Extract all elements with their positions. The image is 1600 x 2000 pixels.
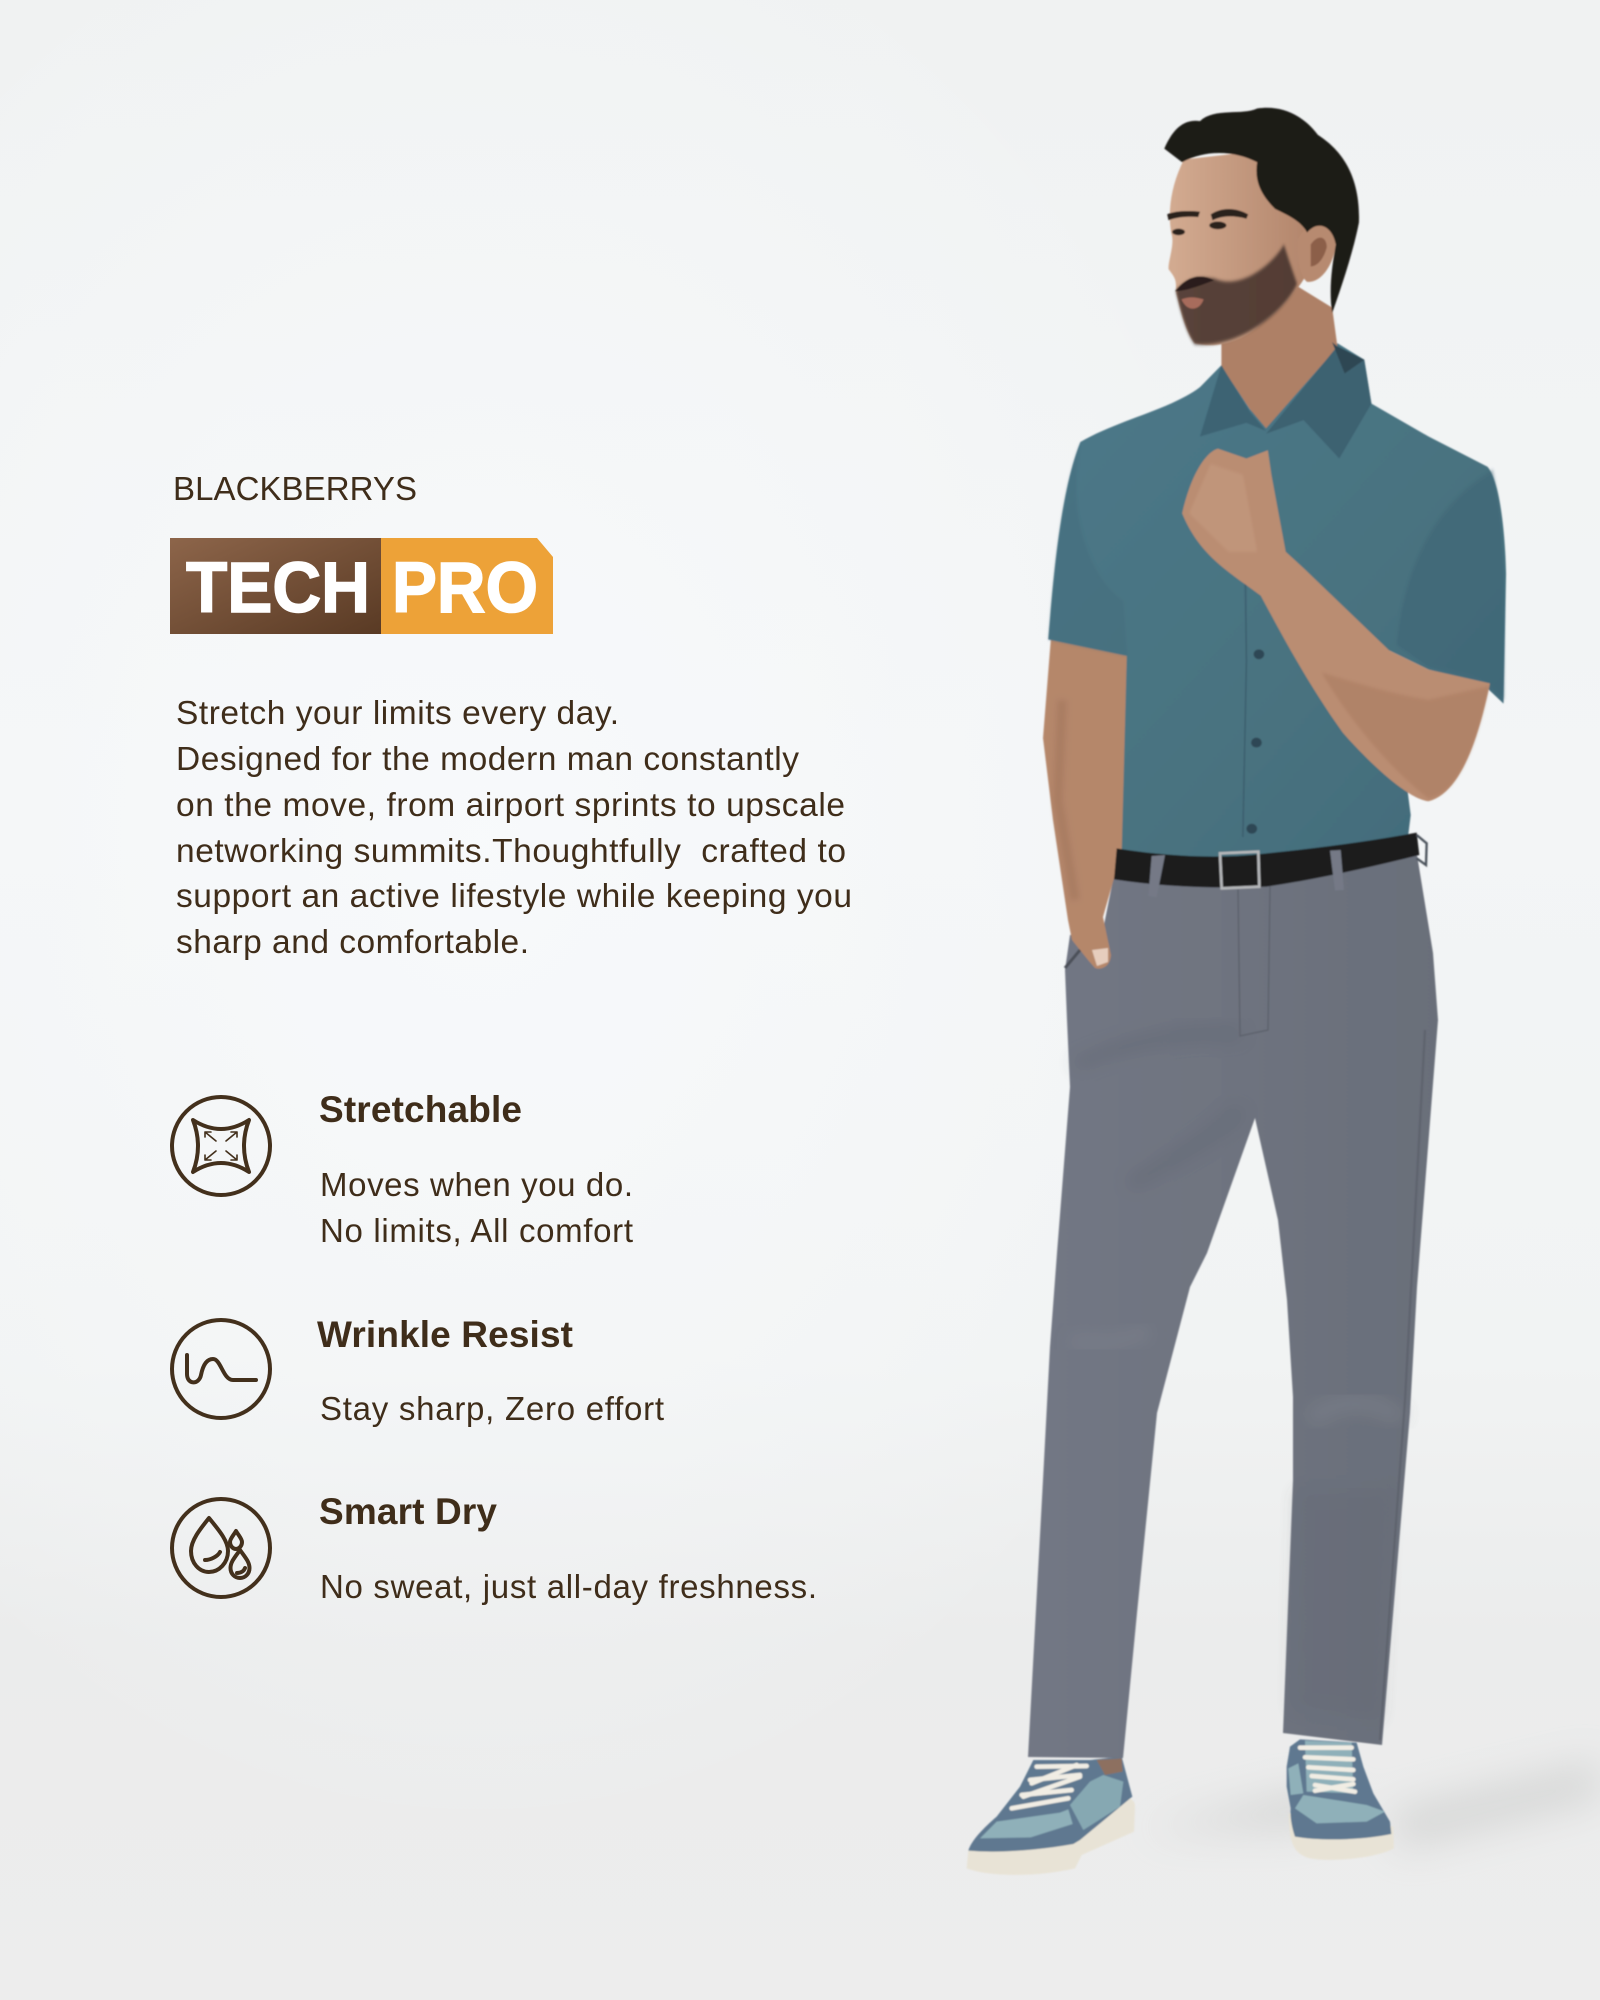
heading: stretchable: Stretchable (319, 1089, 522, 1130)
left arm and hand in pocket (1043, 625, 1130, 969)
feature: stretchable (172, 1089, 633, 1249)
logo: Tech Pro (170, 538, 553, 634)
description text (176, 695, 852, 961)
right shoe (1287, 1739, 1394, 1860)
description text: Designed for the modern man constantly (176, 741, 799, 778)
belt (1114, 833, 1427, 897)
icon: wrinkle line (172, 1320, 270, 1418)
brand name: BLACKBERRYS (173, 470, 417, 507)
stretchable description: No limits, All comfort (320, 1212, 633, 1249)
logo: Tech Pro: PRO (392, 549, 538, 628)
floor shadow (1140, 1760, 1600, 1850)
head (1167, 151, 1336, 345)
smart dry description: No sweat, just all-day freshness. (320, 1568, 817, 1605)
forearm and hand (1182, 449, 1490, 801)
wrinkle resist description: Stay sharp, Zero effort (320, 1390, 664, 1427)
heading: smart dry: Smart Dry (319, 1491, 497, 1532)
heading: wrinkle resist: Wrinkle Resist (317, 1314, 573, 1355)
shirt collar (1200, 342, 1371, 458)
icon: stretch fabric (172, 1097, 270, 1195)
stretchable description (320, 1166, 633, 1249)
stretchable description: Moves when you do. (320, 1166, 633, 1203)
description text: support an active lifestyle while keeping you (176, 878, 852, 915)
model figure (967, 108, 1506, 1875)
left shoe (967, 1757, 1135, 1875)
icon: water drops (172, 1499, 270, 1597)
trousers (1028, 855, 1438, 1758)
shirt buttons (1246, 649, 1264, 834)
description text: networking summits.Thoughtfully crafted to (176, 833, 846, 870)
hair (1164, 108, 1359, 313)
description text: sharp and comfortable. (176, 924, 529, 961)
description text: on the move, from airport sprints to upscale (176, 787, 845, 824)
feature: smart dry (172, 1491, 817, 1605)
feature: wrinkle resist (172, 1314, 664, 1427)
neck (1221, 286, 1337, 428)
shirt (1048, 343, 1506, 870)
logo: Tech Pro: TECH (186, 549, 370, 628)
description text: Stretch your limits every day. (176, 695, 619, 732)
